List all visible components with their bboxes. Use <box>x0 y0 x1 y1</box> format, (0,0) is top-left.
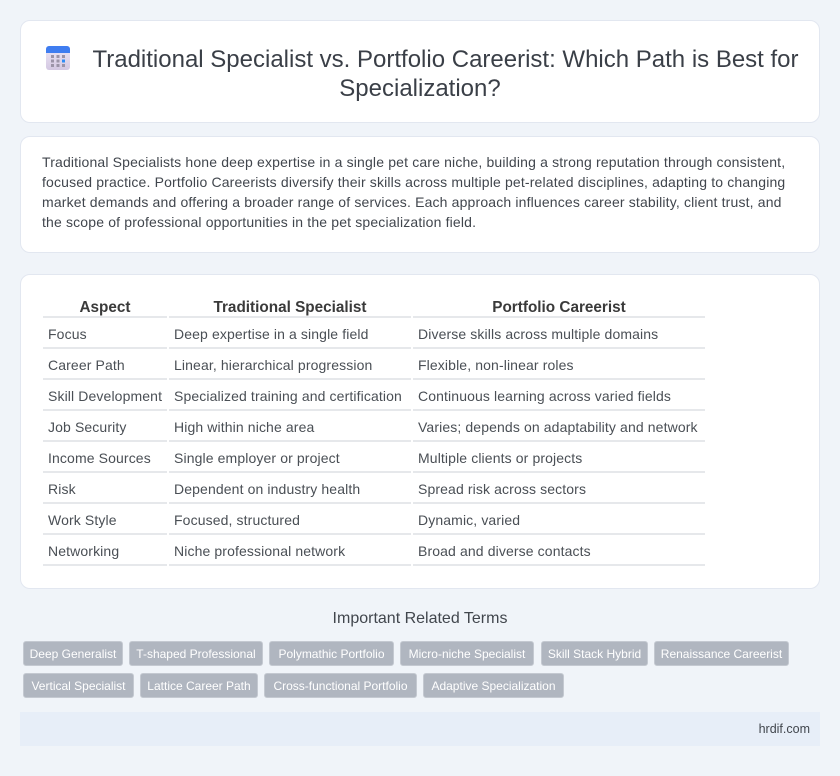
row label: Income Sources: Income Sources <box>48 450 151 466</box>
cell: Multiple clients or projects <box>418 450 582 466</box>
cell: Linear, hierarchical progression <box>174 357 372 373</box>
text block: introduction <box>42 154 785 230</box>
table header: Traditional Specialist <box>169 293 411 318</box>
cell: Broad and diverse contacts <box>418 543 591 559</box>
panel: introduction card <box>20 136 820 253</box>
row label: Risk <box>43 473 167 504</box>
cell <box>413 411 705 442</box>
table header: Portfolio Careerist: Portfolio Careerist <box>492 299 626 316</box>
cell <box>413 504 705 535</box>
cell <box>169 411 411 442</box>
cell: High within niche area <box>174 419 314 435</box>
cell <box>413 473 705 504</box>
table header: Portfolio Careerist <box>413 293 705 318</box>
tag: Cross-functional Portfolio <box>273 679 408 693</box>
footer bar: hrdif.com <box>759 722 810 736</box>
cell <box>169 318 411 349</box>
row label: Focus <box>43 318 167 349</box>
title: Specialization? <box>339 75 501 102</box>
cell <box>413 380 705 411</box>
row label: Work Style: Work Style <box>48 512 117 528</box>
cell: Dynamic, varied <box>418 512 520 528</box>
icon: calendar <box>46 46 70 70</box>
tag: Vertical Specialist <box>31 679 126 693</box>
row label: Career Path: Career Path <box>48 357 125 373</box>
text block: introduction: focused practice. Portfolio Careerists diversify their skills across multiple pet-related disciplines, adapting to changing <box>42 174 785 190</box>
row label: Job Security: Job Security <box>48 419 126 435</box>
tag: Micro-niche Specialist <box>409 647 525 661</box>
tag <box>264 673 417 698</box>
tag: Deep Generalist <box>30 647 116 661</box>
table header: Aspect <box>43 293 167 318</box>
row label: Income Sources <box>43 442 167 473</box>
cell <box>169 380 411 411</box>
cell: Dependent on industry health <box>174 481 360 497</box>
row label: Focus: Focus <box>48 326 87 342</box>
table header: Traditional Specialist: Traditional Specialist <box>213 299 366 316</box>
cell: Varies; depends on adaptability and network <box>418 419 698 435</box>
cell <box>169 349 411 380</box>
table header: Aspect: Aspect <box>79 299 130 316</box>
tag <box>129 641 263 666</box>
tag <box>23 673 134 698</box>
tag: Renaissance Careerist <box>661 647 782 661</box>
text block: introduction: Traditional Specialists hone deep expertise in a single pet care niche, building a strong reputation through consistent, <box>42 154 785 170</box>
heading: related terms: Important Related Terms <box>333 610 507 627</box>
cell <box>169 473 411 504</box>
cell: Spread risk across sectors <box>418 481 586 497</box>
tag: T-shaped Professional <box>136 647 256 661</box>
panel: header card <box>20 20 820 123</box>
tag <box>269 641 394 666</box>
row label: Risk: Risk <box>48 481 76 497</box>
footer bar <box>20 712 820 746</box>
tag <box>541 641 648 666</box>
panel: comparison table card <box>20 274 820 589</box>
cell: Specialized training and certification <box>174 388 402 404</box>
tag: Polymathic Portfolio <box>278 647 385 661</box>
cell: Diverse skills across multiple domains <box>418 326 658 342</box>
cell <box>169 442 411 473</box>
cell <box>413 318 705 349</box>
cell <box>169 504 411 535</box>
cell: Flexible, non-linear roles <box>418 357 574 373</box>
cell: Continuous learning across varied fields <box>418 388 671 404</box>
tag <box>423 673 564 698</box>
row label: Skill Development: Skill Development <box>48 388 162 404</box>
tag <box>23 641 123 666</box>
row label: Job Security <box>43 411 167 442</box>
text block: introduction: the scope of professional opportunities in the pet specialization field. <box>42 214 476 230</box>
cell: Single employer or project <box>174 450 340 466</box>
tag: Skill Stack Hybrid <box>548 647 641 661</box>
cell <box>413 535 705 566</box>
cell <box>413 349 705 380</box>
title <box>92 46 799 102</box>
text block: introduction: market demands and offering a broader range of services. Each approach influences career stability, client trust, and <box>42 194 782 210</box>
cell: Focused, structured <box>174 512 300 528</box>
tag <box>654 641 789 666</box>
cell: Niche professional network <box>174 543 345 559</box>
tag <box>400 641 534 666</box>
cell <box>169 535 411 566</box>
tag: Lattice Career Path <box>147 679 251 693</box>
tag: Adaptive Specialization <box>431 679 556 693</box>
title: Traditional Specialist vs. Portfolio Careerist: Which Path is Best for <box>92 46 799 73</box>
cell: Deep expertise in a single field <box>174 326 369 342</box>
row label: Networking <box>43 535 167 566</box>
row label: Skill Development <box>43 380 167 411</box>
row label: Career Path <box>43 349 167 380</box>
cell <box>413 442 705 473</box>
row label: Work Style <box>43 504 167 535</box>
tag <box>140 673 258 698</box>
row label: Networking: Networking <box>48 543 119 559</box>
